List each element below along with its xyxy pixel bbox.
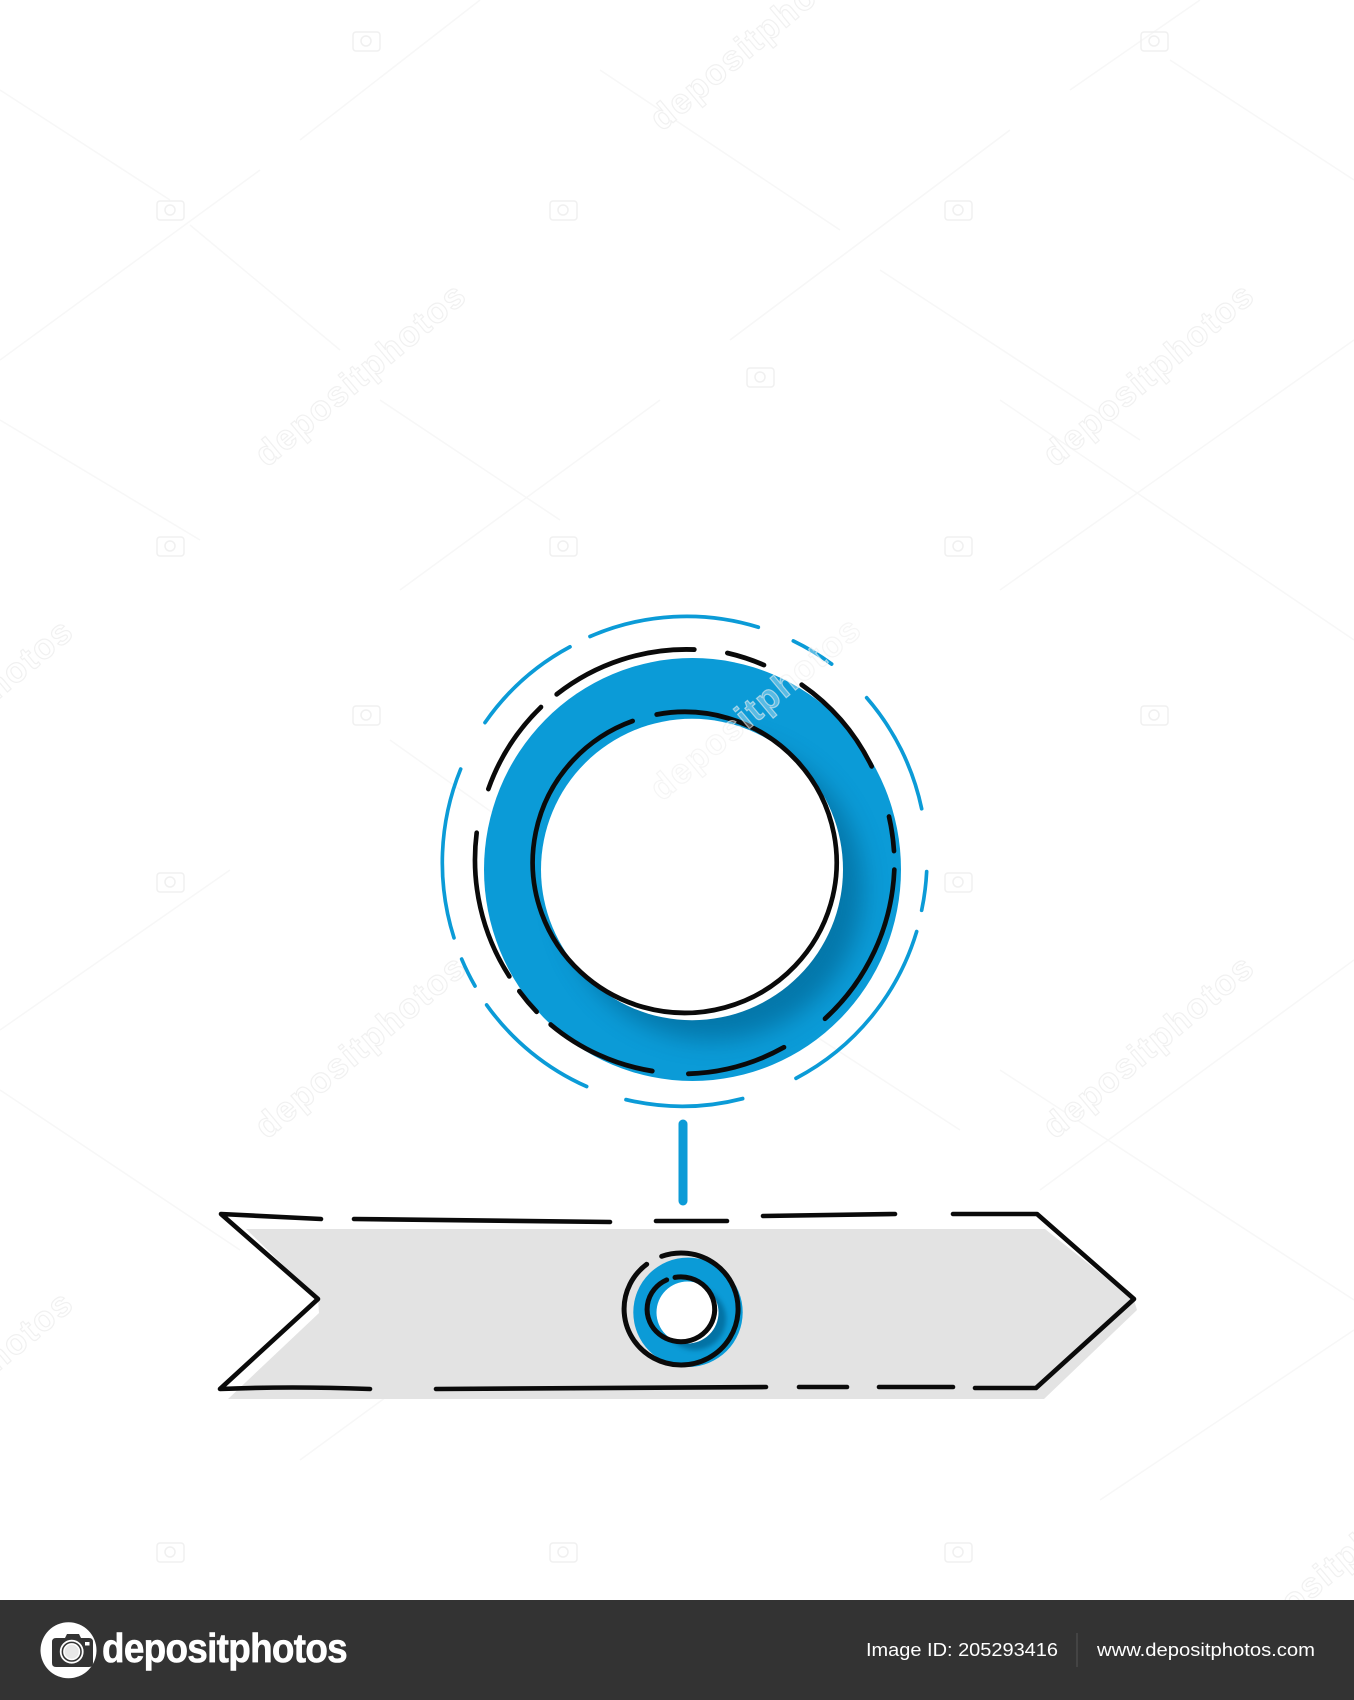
watermark pattern: depositphotos [247,276,473,474]
dashed blue outer orbit [442,616,927,1106]
small ring shadow [664,1288,726,1350]
large ring graphic [442,610,927,1106]
white inner circle [541,719,843,1020]
ring shadow [561,738,863,1040]
connector line [678,1124,688,1201]
footer bar [0,1600,1354,1700]
small ring [624,1253,743,1367]
website url: www.depositphotos.com [1096,1640,1315,1660]
black inner outline [533,712,837,1013]
watermark pattern: depositphotos [1035,948,1261,1146]
footer logo icon [40,1622,96,1678]
footer divider [1076,1633,1078,1667]
blue ring disk [484,658,901,1081]
watermark pattern: depositphotos [247,948,473,1146]
watermark pattern: depositphotos [1035,276,1261,474]
image id: Image ID: 205293416 [866,1640,1058,1660]
banner dashed outline [220,1214,1134,1389]
small white center [656,1282,718,1344]
small ring outlines [624,1253,738,1365]
small ring disk [633,1258,743,1367]
ring watermark: depositphotos [642,610,868,808]
dashed black middle orbit [475,649,894,1074]
arrow banner [220,1214,1137,1399]
banner gray fill [228,1229,1137,1399]
footer logo wordmark: depositphotos [102,1626,348,1671]
